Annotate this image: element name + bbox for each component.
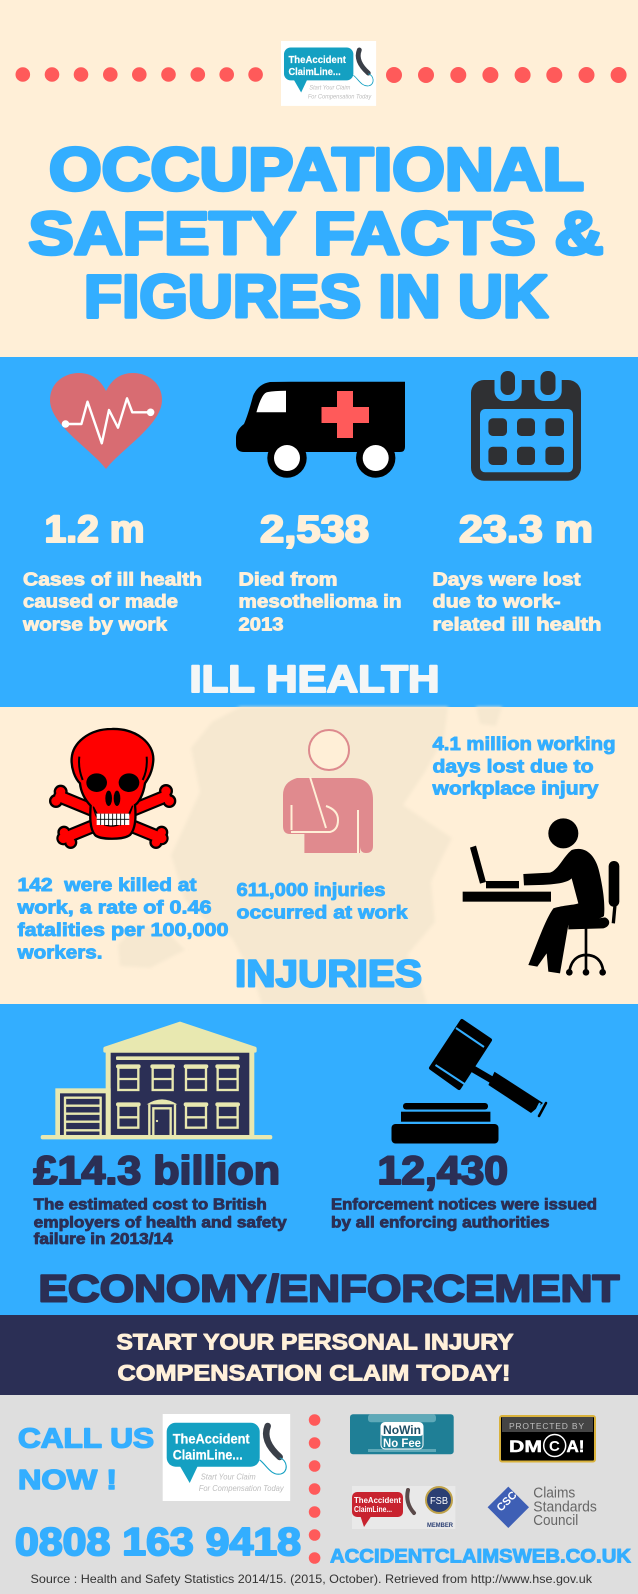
panel: header [0,0,638,357]
stat: £14.3 billion: £14.3 billion [34,1149,280,1193]
text: enforcement notices: by all enforcing authorities [331,1214,550,1231]
logo: The Accident ClaimLine: Start Your Claim [309,85,350,92]
icon: person working at laptop [463,818,619,976]
badge: protected by DMCA: A! [566,1437,584,1456]
logo: The Accident ClaimLine large: TheAccident [173,1431,250,1446]
logo: The Accident ClaimLine [281,41,376,106]
text: cases of ill health [22,569,202,634]
panel: injuries [0,707,638,1004]
badge: protected by DMCA: PROTECTED BY [509,1421,584,1431]
text: website: ACCIDENTCLAIMSWEB.CO.UK [330,1546,631,1568]
text: cases of ill health: worse by work [22,613,168,634]
badge: FSB member [352,1486,455,1529]
stat: 12,430: 12,430 [378,1149,508,1193]
icon: house [41,1023,272,1139]
text: 142 were killed: work, a rate of 0.46 [16,897,211,918]
text: 611,000 injuries [236,879,408,922]
title: FIGURES IN UK [84,263,548,330]
logo: The Accident ClaimLine large: ClaimLine... [173,1447,243,1462]
logo: claims standards council: CSC [495,1489,520,1514]
stat: 2,538: 2,538 [260,509,369,551]
text: phone number: 0808 163 9418 [15,1521,301,1564]
text: estimated cost [34,1196,287,1248]
stat: 1.2 m: 1.2 m [44,509,144,551]
text: died from mesothelioma: mesothelioma in [238,591,402,612]
text: 142 were killed: fatalities per 100,000 [18,919,228,940]
text: 142 were killed: workers. [16,941,102,962]
logo: The Accident ClaimLine: ClaimLine... [288,67,341,78]
dotted divider [309,1414,320,1564]
stat: 23.3 m: 23.3 m [459,509,593,551]
logo: claims standards council [488,1485,597,1529]
badge: protected by DMCA: DM [509,1437,542,1456]
badge: no win no fee: NoWin [383,1425,421,1437]
text: days were lost: related ill health [432,613,602,634]
text: enforcement notices [331,1196,597,1231]
badge: FSB member: FSB [430,1496,448,1507]
heading: ill health: ILL HEALTH [190,659,440,701]
dotted rule: right [386,67,627,83]
icon: skull and crossbones [49,729,176,849]
logo: claims standards council: Claims [533,1485,575,1502]
text: 4.1 million working days lost [431,733,616,798]
icon: person with arm sling [283,730,373,853]
text: 4.1 million working days lost: days lost due to [432,756,594,777]
logo: The Accident ClaimLine large: Start Your Claim [201,1471,256,1481]
title [28,136,604,330]
logo: The Accident ClaimLine large: For Compensation Today [199,1483,284,1493]
panel: footer [0,1395,638,1594]
text: days were lost: Days were lost [432,569,580,590]
text: 142 were killed [16,874,228,962]
panel: ill health [0,357,638,707]
badge: FSB member: TheAccident [354,1496,401,1505]
badge: no win no fee [350,1414,454,1454]
text: call us now: NOW ! [18,1464,117,1495]
text: 4.1 million working days lost: workplace injury [431,777,599,798]
text: start your claim: COMPENSATION CLAIM TODAY! [118,1360,510,1386]
icon: gavel [392,1021,546,1144]
text: estimated cost: The estimated cost to British [34,1196,267,1213]
badge: FSB member: MEMBER [427,1522,453,1529]
icon: ambulance [236,382,405,478]
title: SAFETY FACTS & [28,200,604,267]
badge: FSB member: ClaimLine... [354,1505,392,1514]
panel: economy and enforcement [0,1004,638,1315]
logo: claims standards council: Standards [533,1499,597,1516]
logo: claims standards council: Council [533,1512,578,1529]
heading: injuries: INJURIES [235,954,422,996]
badge: protected by DMCA [500,1416,595,1462]
text: call us now: CALL US [18,1422,154,1454]
title: OCCUPATIONAL [49,136,584,203]
text: 4.1 million working days lost: 4.1 million working [432,733,616,754]
text: died from mesothelioma: Died from [238,569,338,590]
icon: calendar [471,365,581,481]
text: cases of ill health: Cases of ill health [23,569,202,590]
text: 611,000 injuries: 611,000 injuries [236,879,386,900]
logo: The Accident ClaimLine: TheAccident [288,55,347,66]
logo: The Accident ClaimLine: For Compensation Today [308,93,372,100]
dotted rule: left [15,67,263,82]
text: 142 were killed: 142 were killed at [18,874,196,895]
text: days were lost: due to work- [432,591,560,612]
text: estimated cost: employers of health and safety [34,1214,287,1231]
text: estimated cost: failure in 2013/14 [34,1231,173,1248]
text: enforcement notices: Enforcement notices were issued [331,1196,597,1213]
text: source: Source : Health and Safety Statistics 2014/15. (2015, October). Retrieved from http://www.hse.gov.uk [30,1572,593,1586]
text: cases of ill health: caused or made [23,591,178,612]
text: 611,000 injuries: occurred at work [236,901,408,922]
icon: heart with pulse [50,373,162,469]
text: call us now [18,1422,154,1495]
logo: The Accident ClaimLine large [163,1414,290,1501]
text: died from mesothelioma [238,569,402,634]
text: days were lost [432,569,602,634]
heading: economy / enforcement: ECONOMY/ENFORCEMENT [38,1268,620,1310]
text: start your claim [116,1330,514,1386]
text: start your claim: START YOUR PERSONAL INJURY [116,1330,514,1354]
background map [118,707,502,1004]
text: died from mesothelioma: 2013 [238,613,284,634]
panel: call to action banner [0,1315,638,1395]
badge: no win no fee: No Fee [383,1438,421,1450]
badge: protected by DMCA: C [549,1438,560,1455]
